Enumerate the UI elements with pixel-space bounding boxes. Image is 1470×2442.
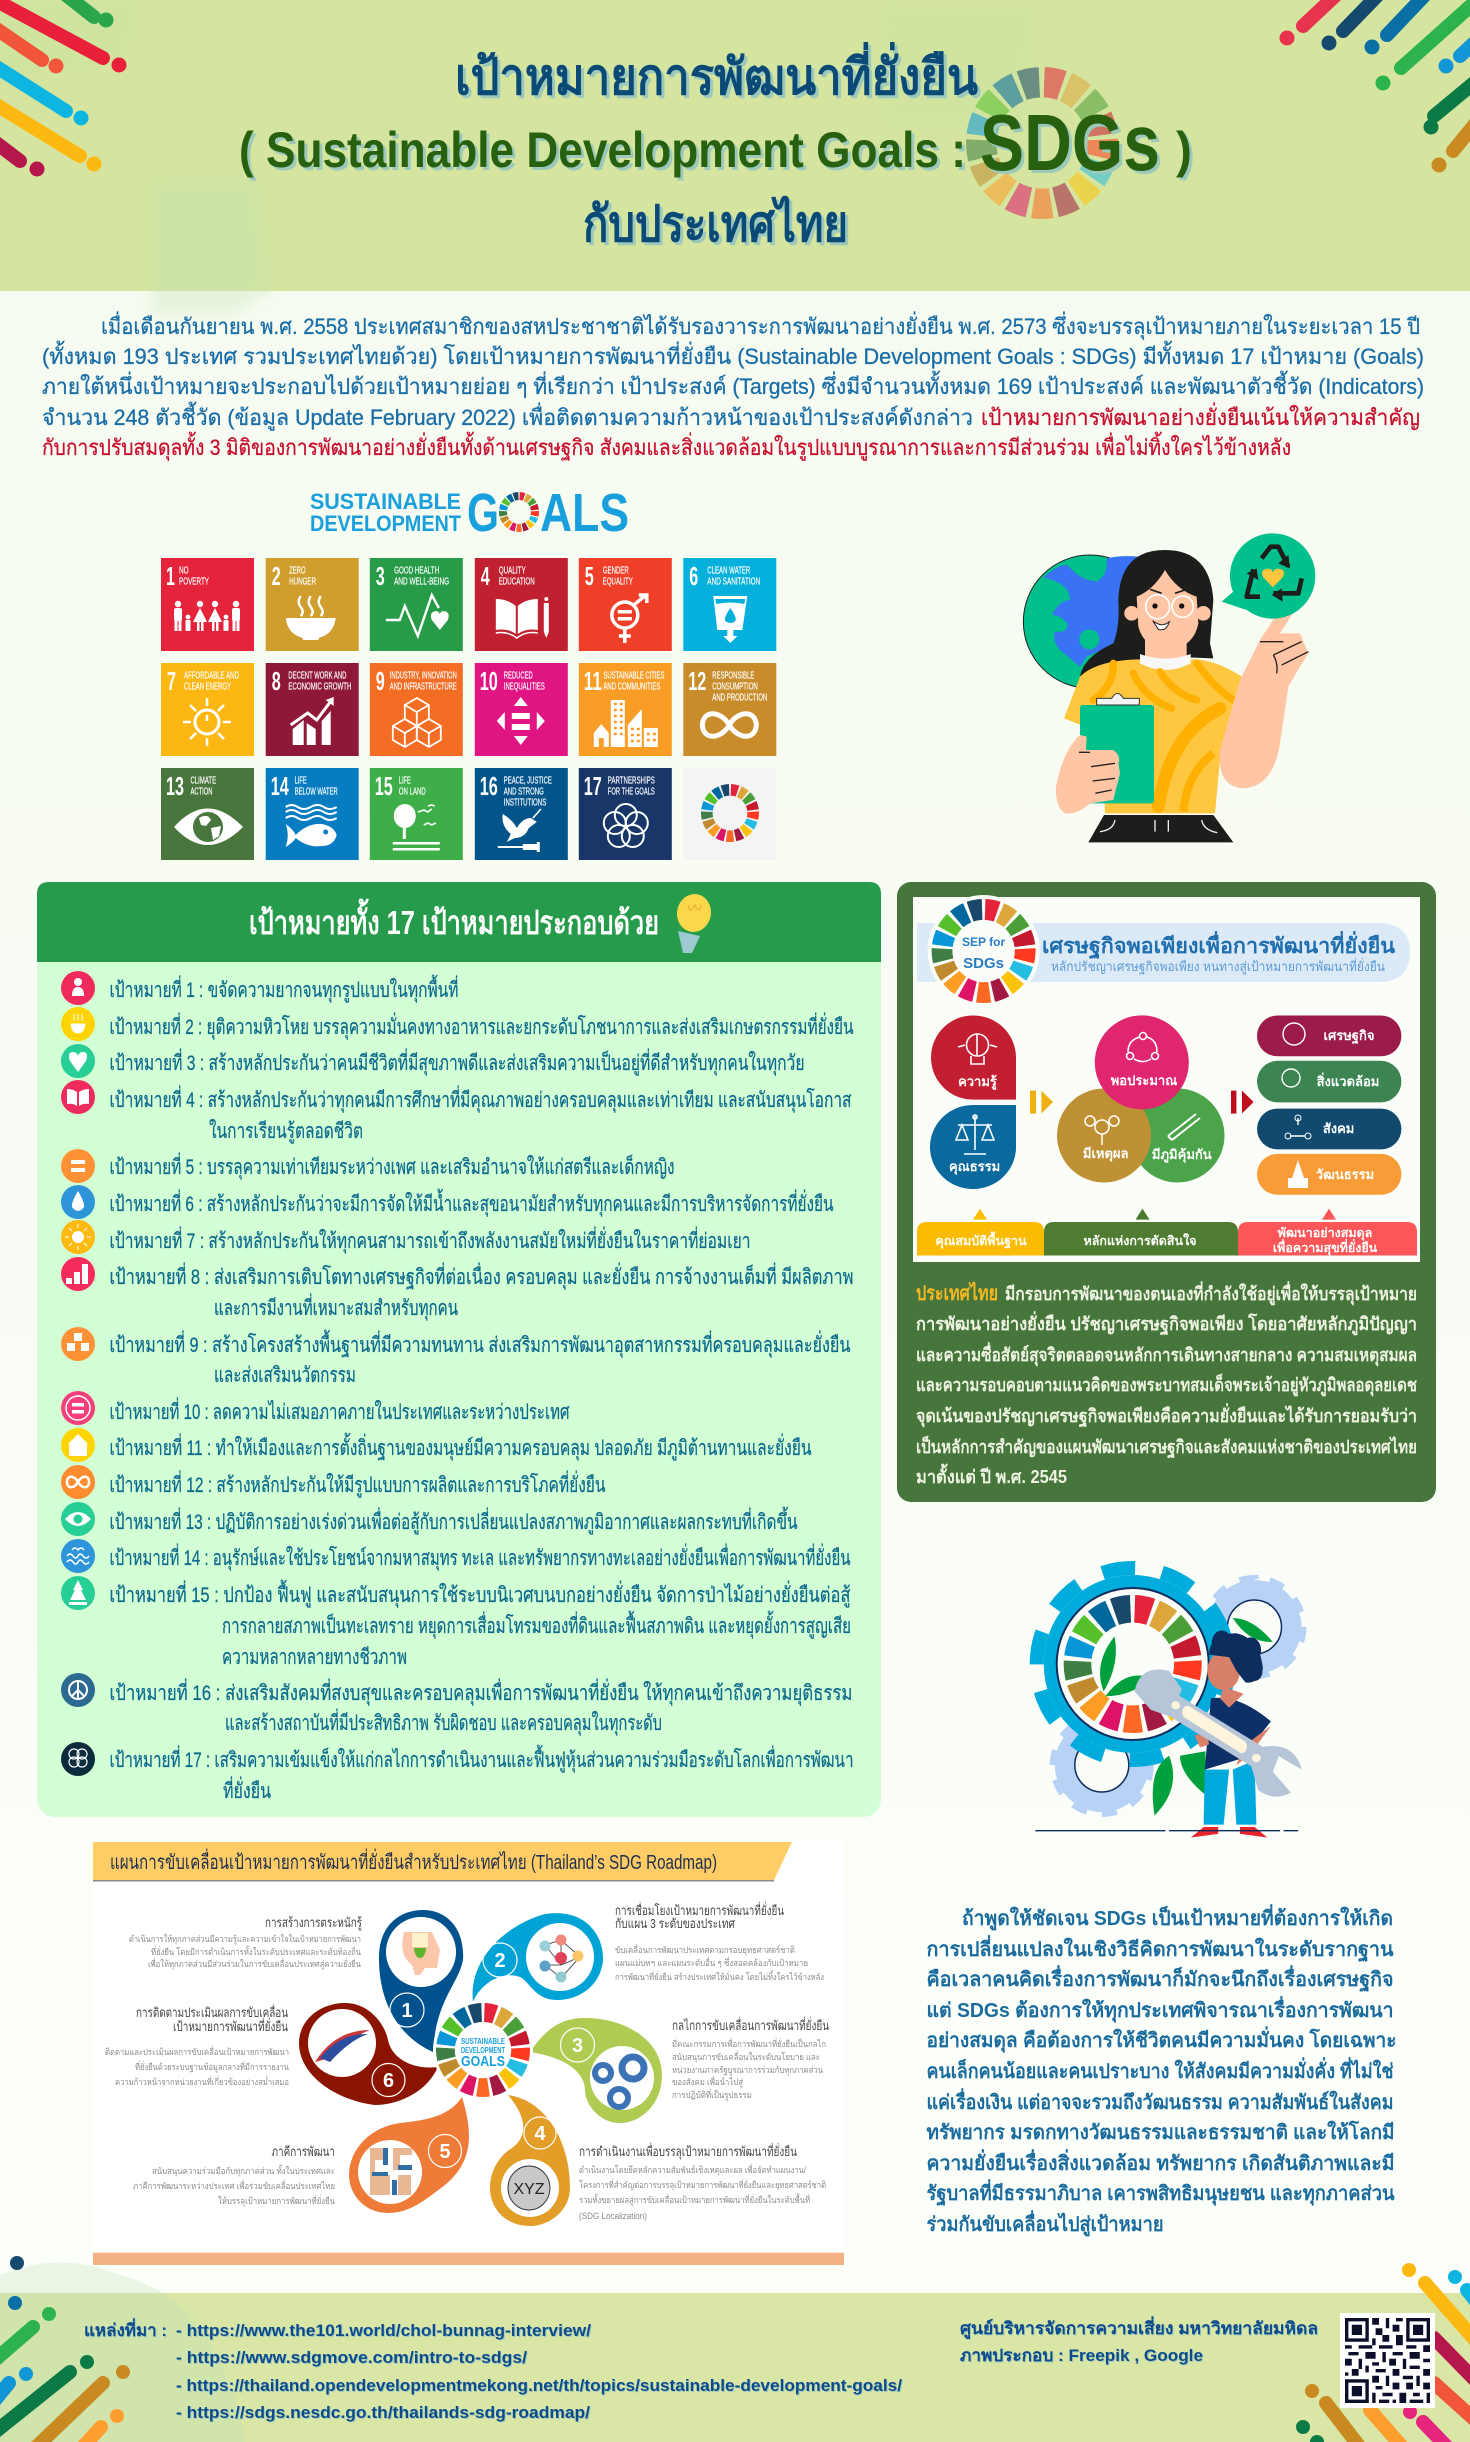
goal 15	[61, 1576, 851, 1669]
tile 15: ON LAND	[399, 786, 426, 798]
roadmap header: แผนการขับเคลื่อนเป้าหมายการพัฒนาที่ยั่งยืนสำหรับประเทศไทย (Thailand’s SDG Roadmap)	[110, 1848, 717, 1874]
roadmap centre wheel	[433, 2000, 533, 2100]
roadmap petal 4	[490, 2095, 570, 2226]
conclusion text: ร่วมกันขับเคลื่อนไปสู่เป้าหมาย	[926, 2209, 1164, 2238]
roadmap text 6: การติดตามประเมินผลการขับเคลื่อน	[136, 2004, 288, 2020]
virtue drop: คุณธรรม	[949, 1159, 1000, 1175]
roadmap petal 4: XYZ	[513, 2181, 545, 2198]
goal 9: และส่งเสริมนวัตกรรม	[214, 1364, 356, 1387]
roadmap petal 5	[349, 2097, 469, 2213]
decorative stripes: bottom right	[1296, 2263, 1470, 2442]
roadmap text 6	[105, 2004, 289, 2087]
roadmap text 2	[615, 1902, 824, 1982]
tile 18: SDG wheel	[683, 768, 776, 860]
conclusion text: ถ้าพูดให้ชัดเจน SDGs เป็นเป้าหมายที่ต้องการให้เกิด	[962, 1903, 1393, 1932]
goal 7: เป้าหมายที่ 7 : สร้างหลักประกันให้ทุกคนสามารถเข้าถึงพลังงานสมัยใหม่ที่ยั่งยืนในราคาที่ย่อมเยา	[110, 1226, 750, 1254]
goal 4	[61, 1080, 852, 1144]
footer sources	[84, 2318, 902, 2422]
SDG logo: G	[467, 483, 499, 543]
goal 7	[61, 1220, 750, 1254]
roadmap petal 2	[473, 1913, 603, 2002]
roadmap text 6: เป้าหมายการพัฒนาที่ยั่งยืน	[173, 2018, 288, 2034]
tile 6	[683, 558, 776, 651]
knowledge drop	[931, 1016, 1016, 1100]
roadmap text 6: ที่ยั่งยืนด้วยระบบฐานข้อมูลกลางที่มีการรายงาน	[135, 2060, 289, 2073]
panel header: เป้าหมายทั้ง 17 เป้าหมายประกอบด้วย	[249, 898, 659, 941]
title	[239, 42, 1192, 252]
roadmap petal 1: 1	[401, 2000, 413, 2022]
panel header	[37, 882, 881, 962]
goal 15: การกลายสภาพเป็นทะเลทราย หยุดการเสื่อมโทรมของที่ดินและฟื้นสภาพดิน และหยุดยั้งการสูญเสีย	[222, 1611, 851, 1639]
tile 12: RESPONSIBLE	[712, 670, 754, 682]
roadmap text 4: (SDG Localization)	[579, 2211, 647, 2221]
goal 1: เป้าหมายที่ 1 : ขจัดความยากจนทุกรูปแบบในทุกพื้นที่	[110, 975, 458, 1003]
SEP banner: เศรษฐกิจพอเพียงเพื่อการพัฒนาที่ยั่งยืน	[1042, 930, 1396, 960]
tile 10: INEQUALITIES	[504, 682, 545, 692]
roadmap text 2: การเชื่อมโยงเป้าหมายการพัฒนาที่ยั่งยืน	[615, 1902, 784, 1918]
roadmap text 6: ติดตามและประเมินผลการขับเคลื่อนเป้าหมายการพัฒนา	[105, 2045, 289, 2057]
goal 9	[61, 1327, 850, 1387]
bottom tabs: หลักแห่งการตัดสินใจ	[1083, 1233, 1197, 1248]
bottom tabs: เพื่อความสุขที่ยั่งยืน	[1273, 1239, 1378, 1256]
tile 8: 8	[272, 666, 281, 696]
tile 11: SUSTAINABLE CITIES	[603, 670, 665, 682]
goal 16	[61, 1673, 852, 1736]
tile 12: CONSUMPTION	[712, 682, 758, 692]
goal 5	[61, 1149, 674, 1183]
tile 1	[161, 558, 254, 651]
conclusion text: แค่เรื่องเงิน แต่อาจจะรวมถึงวัฒนธรรม ความสัมพันธ์ในสังคม	[926, 2087, 1394, 2114]
tile 9: 9	[376, 666, 385, 696]
tile 17: PARTNERSHIPS	[608, 776, 655, 786]
title line 2	[239, 98, 1192, 187]
tile 6: 6	[689, 561, 698, 591]
tile 13: 13	[166, 771, 184, 801]
tile 5: EQUALITY	[603, 576, 633, 588]
tile 17: 17	[584, 771, 602, 801]
tile 8: DECENT WORK AND	[288, 670, 346, 682]
intro paragraph	[42, 311, 1424, 461]
SDG logo: DEVELOPMENT	[310, 511, 461, 536]
title line 2: ( Sustainable Development Goals :	[239, 122, 966, 178]
circle: reason and immunity: มีเหตุผล	[1083, 1146, 1129, 1162]
virtue drop	[930, 1105, 1016, 1189]
panel text: ประเทศไทย	[916, 1281, 998, 1305]
panel text: จุดเน้นของปรัชญาเศรษฐกิจพอเพียงคือความยั่งยืนและได้รับการยอมรับว่า	[916, 1403, 1417, 1428]
tile 8: ECONOMIC GROWTH	[288, 682, 351, 692]
tile 15	[370, 768, 463, 860]
tile 16	[475, 768, 568, 860]
goal 3	[61, 1044, 804, 1078]
tile 16: 16	[480, 771, 498, 801]
tile 8	[266, 663, 359, 756]
roadmap text 1: ดำเนินการให้ทุกภาคส่วนมีความรู้และความเข้าใจในเป้าหมายการพัฒนา	[129, 1934, 361, 1945]
tile 6: AND SANITATION	[707, 576, 760, 588]
goal 11: เป้าหมายที่ 11 : ทำให้เมืองและการตั้งถิ่นฐานของมนุษย์มีความครอบคลุม ปลอดภัย มีภูมิต้านทานและยั่งยืน	[110, 1433, 812, 1461]
SDG logo: ALS	[540, 483, 629, 543]
roadmap text 2: แผนแม่บทฯ และแผนระดับอื่น ๆ ซึ่งสอดคล้องกับเป้าหมาย	[615, 1956, 808, 1968]
roadmap centre wheel: SUSTAINABLE	[461, 2037, 506, 2046]
roadmap petal 6: 6	[383, 2070, 394, 2092]
tile 10	[475, 663, 568, 756]
tile 3	[370, 558, 463, 651]
conclusion text: คือเวลาคนคิดเรื่องการพัฒนาก็มักจะนึกถึงเรื่องเศรษฐกิจ	[926, 1964, 1394, 1993]
SEP banner: SDGs	[963, 955, 1004, 972]
roadmap text 2: การพัฒนาที่ยั่งยืน สร้างประเทศให้มั่นคง โดยไม่ทิ้งใครไว้ข้างหลัง	[615, 1970, 824, 1982]
tile 15: LIFE	[399, 776, 411, 786]
intro paragraph: จำนวน 248 ตัวชี้วัด (ข้อมูล Update February 2022) เพื่อติดตามความก้าวหน้าของเป้าประสงค์ดังกล่าว	[42, 402, 973, 431]
roadmap text 3: กลไกการขับเคลื่อนการพัฒนาที่ยั่งยืน	[672, 2017, 829, 2033]
tile 14: BELOW WATER	[295, 786, 338, 798]
tile 14	[266, 768, 359, 860]
SDG logo	[310, 483, 629, 543]
footer sources: - https://www.sdgmove.com/intro-to-sdgs/	[176, 2348, 527, 2367]
roadmap text 3: สนับสนุนการขับเคลื่อนในระดับนโยบาย และ	[672, 2050, 820, 2063]
goal 16: และสร้างสถาบันที่มีประสิทธิภาพ รับผิดชอบ และครอบคลุมในทุกระดับ	[225, 1708, 662, 1736]
goal 12	[61, 1465, 606, 1499]
goal 17: ที่ยั่งยืน	[223, 1776, 271, 1803]
circle: reason and immunity: พอประมาณ	[1111, 1073, 1177, 1088]
footer sources: - https://www.the101.world/chol-bunnag-interview/	[176, 2321, 591, 2340]
goal 4: เป้าหมายที่ 4 : สร้างหลักประกันว่าทุกคนมีการศึกษาที่มีคุณภาพอย่างครอบคลุมและเท่าเทียม และสนับสนุนโอกาส	[110, 1085, 852, 1113]
bottom tabs: พัฒนาอย่างสมดุล	[1278, 1226, 1372, 1241]
SDG tile grid	[161, 558, 776, 860]
roadmap text 5: ภาคีการพัฒนาระหว่างประเทศ เพื่อร่วมขับเคลื่อนประเทศไทย	[133, 2179, 335, 2191]
illustration: woman with globe	[1023, 533, 1315, 842]
tile 6: CLEAN WATER	[707, 566, 750, 576]
panel text: มาตั้งแต่ ปี พ.ศ. 2545	[916, 1463, 1067, 1487]
pill: society: สังคม	[1323, 1121, 1354, 1136]
tile 9: AND INFRASTRUCTURE	[390, 682, 457, 692]
arrow: yellow	[1030, 1091, 1053, 1114]
roadmap centre wheel: GOALS	[461, 2053, 505, 2070]
goal 2: เป้าหมายที่ 2 : ยุติความหิวโหย บรรลุความมั่นคงทางอาหารและยกระดับโภชนาการและส่งเสริมเกษตรกรรมที่ยั่งยืน	[110, 1012, 854, 1040]
goal 12: เป้าหมายที่ 12 : สร้างหลักประกันให้มีรูปแบบการผลิตและการบริโภคที่ยั่งยืน	[110, 1470, 606, 1498]
tile 5	[579, 558, 672, 651]
decorative stripes: top left	[0, 0, 126, 176]
conclusion text: การเปลี่ยนแปลงในเชิงวิธีคิดการพัฒนาในระดับรากฐาน	[926, 1934, 1394, 1963]
pill: economy	[1257, 1016, 1401, 1056]
goal 5: เป้าหมายที่ 5 : บรรลุความเท่าเทียมระหว่างเพศ และเสริมอำนาจให้แก่สตรีและเด็กหญิง	[110, 1152, 674, 1180]
goal 6	[61, 1185, 834, 1219]
goal 17: เป้าหมายที่ 17 : เสริมความเข้มแข็งให้แก่กลไกการดำเนินงานและฟื้นฟูหุ้นส่วนความร่วมมือระดับโลกเพื่อการพัฒนา	[110, 1745, 854, 1773]
circle: reason and immunity	[1057, 1015, 1224, 1182]
roadmap petal 3	[530, 2018, 662, 2123]
illustration: gears and person with wrench	[1035, 1568, 1302, 1838]
panel: Thailand sufficiency economy	[897, 882, 1436, 1502]
conclusion text	[926, 1903, 1396, 2238]
tile 5: 5	[585, 561, 594, 591]
knowledge drop: ความรู้	[958, 1074, 997, 1090]
tile 7: AFFORDABLE AND	[184, 670, 239, 682]
roadmap text 4	[579, 2143, 826, 2221]
tile 11: AND COMMUNITIES	[603, 682, 661, 692]
tile 4	[475, 558, 568, 651]
roadmap text 5	[133, 2144, 335, 2207]
pill: society	[1257, 1109, 1401, 1149]
roadmap text 3: การปฏิบัติที่เป็นรูปธรรม	[672, 2088, 752, 2101]
triangles	[973, 1209, 1336, 1220]
footer sources: แหล่งที่มา :	[84, 2318, 167, 2340]
tile 5: GENDER	[603, 566, 629, 576]
goal 16: เป้าหมายที่ 16 : ส่งเสริมสังคมที่สงบสุขและครอบคลุมเพื่อการพัฒนาที่ยั่งยืน ให้ทุกคนเข้าถึงความยุติธรรม	[110, 1678, 852, 1706]
panel text	[916, 1281, 1417, 1487]
roadmap text 1: การสร้างการตระหนักรู้	[265, 1915, 362, 1931]
tile 2	[266, 558, 359, 651]
roadmap text 5: ภาคีการพัฒนา	[272, 2144, 335, 2159]
goal 8: เป้าหมายที่ 8 : ส่งเสริมการเติบโตทางเศรษฐกิจที่ต่อเนื่อง ครอบคลุม และยั่งยืน การจ้างงานเต็มที่ มีผลิตภาพ	[110, 1262, 854, 1290]
goal 3: เป้าหมายที่ 3 : สร้างหลักประกันว่าคนมีชีวิตที่มีสุขภาพดีและส่งเสริมความเป็นอยู่ที่ดีสำหรับทุกคนในทุกวัย	[110, 1048, 804, 1076]
panel text: มีกรอบการพัฒนาของตนเองที่กำลังใช้อยู่เพื่อให้บรรลุเป้าหมาย	[1005, 1281, 1417, 1306]
tile 9	[370, 663, 463, 756]
tile 16: INSTITUTIONS	[504, 798, 546, 808]
tile 4: EDUCATION	[499, 576, 535, 588]
tile 16: PEACE, JUSTICE	[504, 776, 552, 786]
pill: environment	[1257, 1061, 1401, 1102]
goal 2	[61, 1007, 854, 1041]
bottom tabs: คุณสมบัติพื้นฐาน	[935, 1231, 1027, 1249]
intro paragraph: ภายใต้หนึ่งเป้าหมายจะประกอบไปด้วยเป้าหมายย่อย ๆ ที่เรียกว่า เป้าประสงค์ (Targets) ซึ่งมีจำนวนทั้งหมด 169 เป้าประสงค์ และพัฒนาตัวชี้วัด (Indicators)	[42, 371, 1424, 399]
title line 2: SDGs	[980, 98, 1160, 187]
conclusion text: คนเล็กคนน้อยและคนเปราะบาง ให้สังคมมีความมั่งคั่ง ที่ไม่ใช่	[926, 2056, 1394, 2083]
roadmap text blocks	[105, 1902, 829, 2221]
roadmap text 4: โครงการที่สำคัญต่อการบรรลุเป้าหมายการพัฒนาที่ยั่งยืนและยุทธศาสตร์ชาติ	[579, 2178, 826, 2191]
tile 13	[161, 768, 254, 860]
roadmap text 5: สนับสนุนความร่วมมือกับทุกภาคส่วน ทั้งในประเทศและ	[152, 2164, 335, 2177]
tile 10: 10	[480, 666, 498, 696]
goal 8	[61, 1257, 854, 1321]
goal 15: ความหลากหลายทางชีวภาพ	[222, 1646, 407, 1669]
roadmap text 1: ที่ยั่งยืน โดยมีการดำเนินการทั้งในระดับประเทศและระดับท้องถิ่น	[151, 1945, 361, 1957]
footer credits: ศูนย์บริหารจัดการความเสี่ยง มหาวิทยาลัยมหิดล	[960, 2316, 1318, 2340]
circle: reason and immunity: มีภูมิคุ้มกัน	[1152, 1147, 1212, 1163]
pill: environment: สิ่งแวดล้อม	[1317, 1072, 1379, 1089]
tile 17	[579, 768, 672, 860]
roadmap petal 2: 2	[494, 1950, 506, 1972]
tile 14: LIFE	[295, 776, 307, 786]
footer credits: ภาพประกอบ : Freepik , Google	[960, 2346, 1203, 2365]
roadmap centre wheel: DEVELOPMENT	[461, 2046, 505, 2055]
roadmap text 4: การดำเนินงานเพื่อบรรลุเป้าหมายการพัฒนาที่ยั่งยืน	[579, 2143, 797, 2160]
tile 16: AND STRONG	[504, 786, 544, 798]
tile 12: AND PRODUCTION	[712, 692, 767, 704]
roadmap text 2: กับแผน 3 ระดับของประเทศ	[615, 1916, 736, 1931]
bottom tabs	[917, 1222, 1417, 1256]
pills	[1257, 1016, 1401, 1195]
roadmap text 1: เพื่อให้ทุกภาคส่วนมีส่วนร่วมในการขับเคลื่อนประเทศสู่ความยั่งยืน	[148, 1957, 361, 1970]
tile 12: 12	[688, 666, 706, 696]
SEP banner: หลักปรัชญาเศรษฐกิจพอเพียง หนทางสู่เป้าหมายการพัฒนาที่ยั่งยืน	[1051, 958, 1385, 975]
conclusion text: อย่างสมดุล คือต้องการให้ชีวิตคนมีความมั่นคง โดยเฉพาะ	[926, 2025, 1396, 2053]
tile 1: NO	[179, 566, 189, 576]
footer band	[0, 2262, 1470, 2442]
SEP diagram	[913, 895, 1420, 1262]
pill: economy: เศรษฐกิจ	[1324, 1028, 1374, 1045]
footer credits	[960, 2316, 1318, 2365]
goal 13: เป้าหมายที่ 13 : ปฏิบัติการอย่างเร่งด่วนเพื่อต่อสู้กับการเปลี่ยนแปลงสภาพภูมิอากาศและผลกระทบที่เกิดขึ้น	[110, 1507, 798, 1535]
roadmap text 1	[129, 1915, 362, 1970]
tile 7: 7	[167, 666, 176, 696]
conclusion text: แต่ SDGs ต้องการให้ทุกประเทศพิจารณาเรื่องการพัฒนา	[926, 1995, 1394, 2023]
header band	[0, 0, 1470, 315]
tile 4: QUALITY	[499, 566, 526, 576]
roadmap text 5: ให้บรรลุเป้าหมายการพัฒนาที่ยั่งยืน	[218, 2194, 335, 2207]
pill: culture	[1257, 1154, 1401, 1195]
tile 15: 15	[375, 771, 393, 801]
tile 13: CLIMATE	[190, 776, 216, 786]
roadmap text 3	[672, 2017, 829, 2101]
roadmap text 2: ขับเคลื่อนการพัฒนาประเทศตามกรอบยุทธศาสตร์ชาติ	[615, 1943, 795, 1956]
goal 4: ในการเรียนรู้ตลอดชีวิต	[209, 1119, 363, 1144]
intro paragraph: (ทั้งหมด 193 ประเทศ รวมประเทศไทยด้วย) โดยเป้าหมายการพัฒนาที่ยั่งยืน (Sustainable Development Goals : SDGs) มีทั้งหมด 17 เป้าหมาย (Goals)	[42, 341, 1424, 369]
footer sources: - https://thailand.opendevelopmentmekong.net/th/topics/sustainable-development-goals/	[176, 2376, 902, 2395]
goal 14	[61, 1539, 850, 1573]
decorative stripes: top right	[1280, 0, 1470, 172]
goal 13	[61, 1502, 798, 1536]
SEP banner	[917, 895, 1410, 1007]
tile 11	[579, 663, 672, 756]
roadmap petal 1	[379, 1910, 463, 2052]
roadmap text 3: มีคณะกรรมการเพื่อการพัฒนาที่ยั่งยืนเป็นกลไก	[672, 2037, 826, 2049]
roadmap petal 3: 3	[572, 2035, 583, 2057]
conclusion text: รัฐบาลที่มีธรรมาภิบาล เคารพสิทธิมนุษยชน และทุกภาคส่วน	[926, 2178, 1395, 2207]
QR code	[1340, 2313, 1435, 2408]
roadmap text 3: ของสังคม เพื่อนำไปสู่	[672, 2075, 743, 2088]
tile 13: ACTION	[190, 786, 212, 798]
tile 2: 2	[272, 561, 281, 591]
roadmap petal 5: 5	[439, 2141, 451, 2163]
goal 8: และการมีงานที่เหมาะสมสำหรับทุกคน	[214, 1293, 458, 1321]
tile 10: REDUCED	[504, 670, 533, 682]
SEP banner: SEP for	[962, 935, 1005, 949]
goal list	[61, 971, 854, 1803]
roadmap text 4: ดำเนินงานโดยยึดหลักความสัมพันธ์เชิงเหตุและผล เพื่อจัดทำแผนงาน/	[579, 2163, 806, 2176]
intro paragraph: กับการปรับสมดุลทั้ง 3 มิติของการพัฒนาอย่างยั่งยืนทั้งด้านเศรษฐกิจ สังคมและสิ่งแวดล้อมในรูปแบบบูรณาการและการมีส่วนร่วม เพื่อไม่ทิ้งใครไว้ข้างหลัง	[42, 432, 1291, 461]
tile 1: 1	[166, 561, 175, 591]
tile 4: 4	[481, 561, 490, 591]
tile 17: FOR THE GOALS	[608, 786, 655, 798]
tile 7: CLEAN ENERGY	[184, 682, 231, 692]
tile 2: HUNGER	[289, 576, 316, 588]
tile 3: AND WELL-BEING	[394, 576, 449, 588]
goal 11	[61, 1428, 812, 1462]
tile 3: 3	[376, 561, 385, 591]
goal 6: เป้าหมายที่ 6 : สร้างหลักประกันว่าจะมีการจัดให้มีน้ำและสุขอนามัยสำหรับทุกคนและมีการบริหารจัดการที่ยั่งยืน	[110, 1189, 834, 1217]
roadmap text 3: หน่วยงานภาครัฐบูรณาการร่วมกับทุกภาคส่วน	[672, 2065, 823, 2076]
goal 1	[61, 971, 458, 1005]
tile 11: 11	[584, 666, 602, 696]
tile 3: GOOD HEALTH	[394, 566, 439, 576]
panel text: การพัฒนาอย่างยั่งยืน ปรัชญาเศรษฐกิจพอเพียง โดยอาศัยหลักภูมิปัญญา	[916, 1311, 1417, 1336]
SDG logo: SUSTAINABLE	[310, 489, 461, 514]
tile 9: INDUSTRY, INNOVATION	[390, 670, 457, 682]
roadmap petal 6	[299, 2003, 438, 2105]
panel: 17 goals	[37, 882, 881, 1817]
conclusion text: ความยั่งยืนเรื่องสิ่งแวดล้อม ทรัพยากร เกิดสันติภาพและมี	[926, 2148, 1394, 2175]
intro paragraph: เป้าหมายการพัฒนาอย่างยั่งยืนเน้นให้ความสำคัญ	[981, 402, 1420, 430]
conclusion text: ทรัพยากร มรดกทางวัฒนธรรมและธรรมชาติ และให้โลกมี	[926, 2120, 1394, 2144]
title wheel	[981, 82, 1103, 204]
tile 14: 14	[271, 771, 289, 801]
tile 12	[683, 663, 776, 756]
roadmap header	[93, 1842, 792, 1882]
tile 7	[161, 663, 254, 756]
goal 9: เป้าหมายที่ 9 : สร้างโครงสร้างพื้นฐานที่มีความทนทาน ส่งเสริมการพัฒนาอุตสาหกรรมที่ครอบคลุมและยั่งยืน	[110, 1330, 850, 1358]
goal 10: เป้าหมายที่ 10 : ลดความไม่เสมอภาคภายในประเทศและระหว่างประเทศ	[110, 1397, 570, 1424]
tile 1: POVERTY	[179, 576, 209, 588]
goal 14: เป้าหมายที่ 14 : อนุรักษ์และใช้ประโยชน์จากมหาสมุทร ทะเล และทรัพยากรทางทะเลอย่างยั่งยืนเพื่อการพัฒนาที่ยั่งยืน	[110, 1543, 850, 1571]
decorative stripes: bottom left	[0, 2256, 130, 2442]
roadmap text 4: รวมทั้งขยายผลสู่การขับเคลื่อนเป้าหมายการพัฒนาที่ยั่งยืนในระดับพื้นที่	[579, 2193, 810, 2206]
footer sources: - https://sdgs.nesdc.go.th/thailands-sdg-roadmap/	[176, 2403, 590, 2422]
roadmap petal 4: 4	[534, 2123, 546, 2145]
goal 10	[61, 1391, 570, 1425]
pill: culture: วัฒนธรรม	[1316, 1167, 1374, 1182]
tile 2: ZERO	[289, 566, 306, 576]
icon: light bulb	[674, 891, 714, 953]
panel: Thailand SDG roadmap	[93, 1842, 844, 2265]
title line 3: กับประเทศไทย	[583, 195, 848, 252]
goal 17	[61, 1742, 854, 1803]
arrow: red	[1231, 1091, 1254, 1114]
roadmap text 6: ความก้าวหน้าจากหน่วยงานที่เกี่ยวข้องอย่างสม่ำเสมอ	[115, 2075, 289, 2087]
title line 1: เป้าหมายการพัฒนาที่ยั่งยืน	[455, 42, 978, 105]
title line 2: )	[1176, 122, 1192, 178]
goal 15: เป้าหมายที่ 15 : ปกป้อง ฟื้นฟู และสนับสนุนการใช้ระบบนิเวศบนบกอย่างยั่งยืน จัดการป่าไม้อย่างยั่งยืนต่อสู้	[110, 1580, 851, 1608]
